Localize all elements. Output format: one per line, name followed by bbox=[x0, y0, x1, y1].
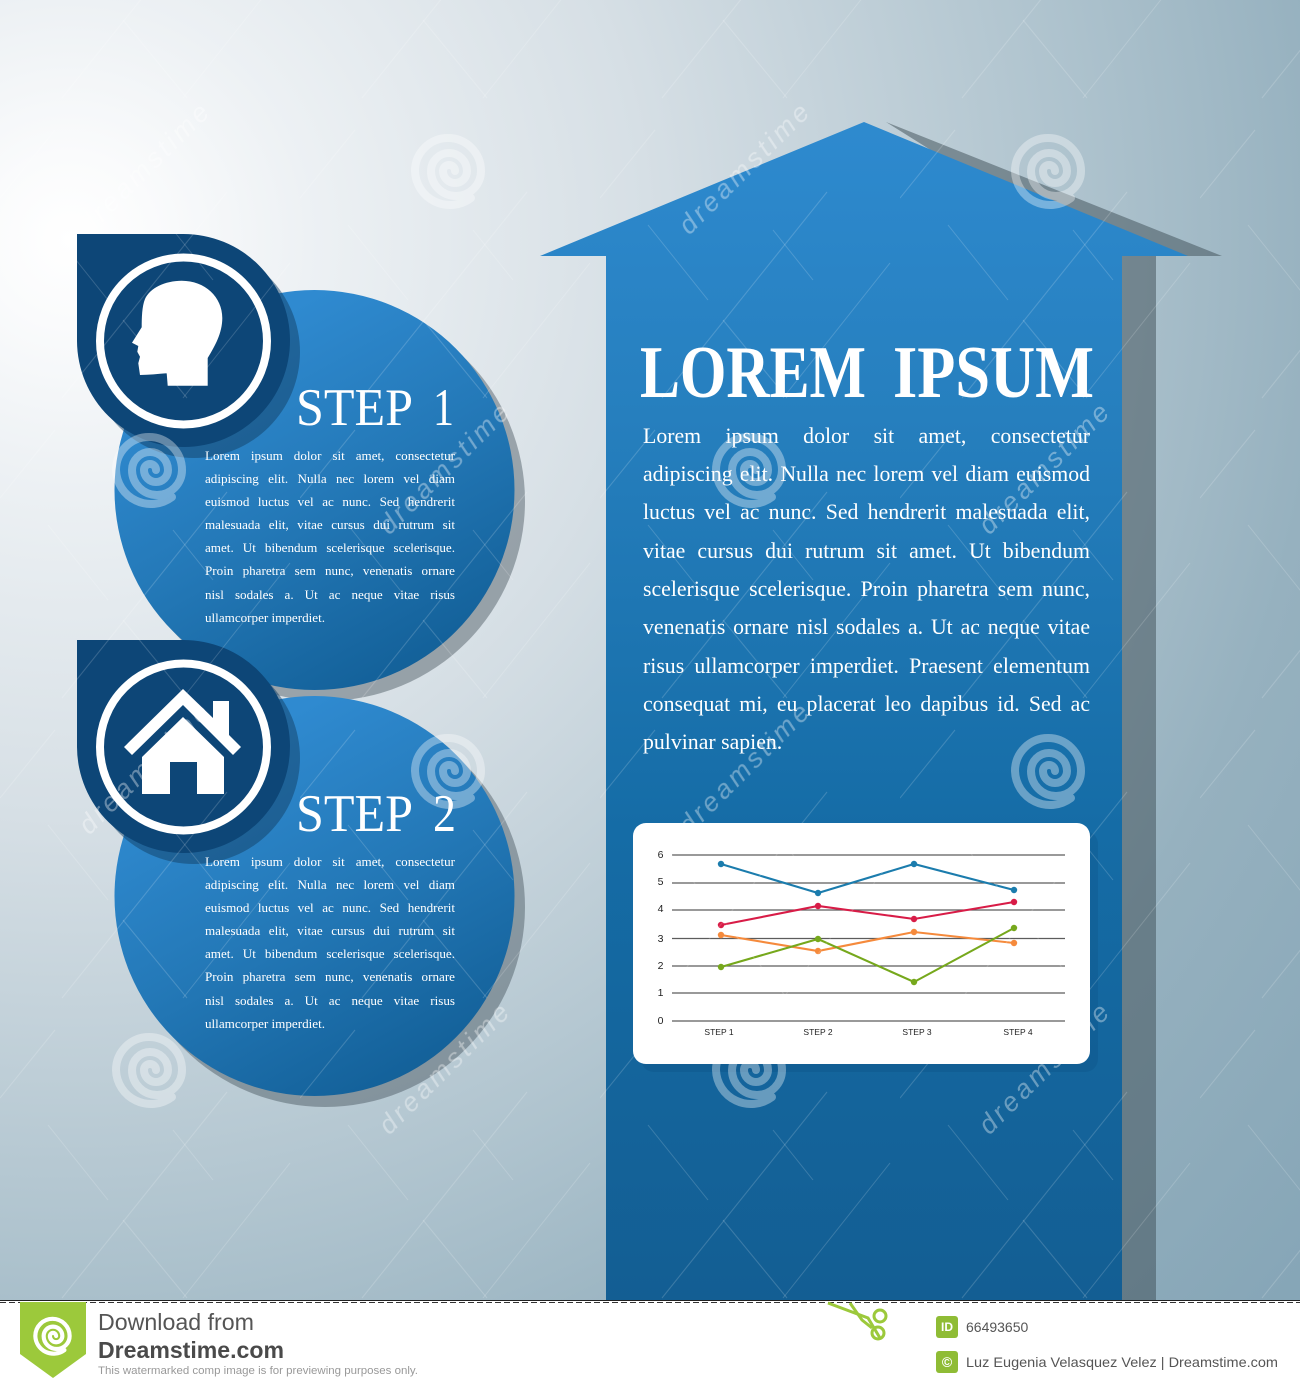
text block: step 1 body: malesuada elit, vitae cursus dui rutrum sit bbox=[205, 517, 455, 532]
title: IPSUM bbox=[893, 332, 1094, 414]
text block: step 2 body: Proin pharetra sem nunc, venenatis ornare bbox=[205, 969, 455, 984]
text block: step 1 body: adipiscing elit. Nulla nec lorem vel diam bbox=[205, 471, 455, 486]
text block: step 1 body: euismod luctus vel ac nunc. Sed hendrerit bbox=[205, 494, 455, 509]
line chart card: STEP 4 bbox=[1003, 1027, 1033, 1037]
icon: dreamstime ribbon bbox=[20, 1302, 86, 1378]
icon: step 2 house badge bbox=[77, 640, 300, 864]
title: LOREM bbox=[640, 332, 866, 414]
text block: step 2 body bbox=[205, 854, 455, 1031]
watermark: dreamstime text: dreamstime bbox=[972, 397, 1115, 540]
icon: step 1 person badge bbox=[77, 234, 300, 458]
footer band bbox=[0, 1300, 1300, 1390]
text block: step 2 body: malesuada elit, vitae cursus dui rutrum sit bbox=[205, 923, 455, 938]
arrow shadow bbox=[886, 122, 1222, 1300]
footer: download text: Download from bbox=[98, 1309, 254, 1335]
text block: step 1 body: nisl sodales a. Ut ac neque vitae risus bbox=[205, 587, 455, 602]
line chart card: STEP 3 bbox=[902, 1027, 932, 1037]
line chart card: 1 bbox=[658, 987, 664, 999]
footer: image id: 66493650 bbox=[966, 1319, 1029, 1335]
text block: step 1 body: ullamcorper imperdiet. bbox=[205, 610, 325, 625]
icon: id badge: ID bbox=[941, 1320, 953, 1334]
text block: main body: vitae cursus dui rutrum sit amet. Ut bibendum bbox=[643, 539, 1090, 563]
heading: step 2: STEP bbox=[296, 785, 413, 843]
text block: step 2 body: euismod luctus vel ac nunc. Sed hendrerit bbox=[205, 900, 455, 915]
line chart card: 2 bbox=[658, 960, 664, 972]
line chart card: 3 bbox=[658, 933, 664, 945]
text block: main body: pulvinar sapien. bbox=[643, 730, 782, 754]
footer: download text bbox=[98, 1309, 418, 1377]
heading: step 1: STEP bbox=[296, 379, 413, 437]
text block: main body bbox=[643, 424, 1090, 754]
text block: main body: Lorem ipsum dolor sit amet, consectetur bbox=[643, 424, 1090, 448]
panel: step 1 disc bbox=[114, 290, 525, 701]
watermark: dreamstime text: dreamstime bbox=[72, 697, 215, 840]
text block: step 1 body bbox=[205, 448, 455, 625]
icon: scissors bbox=[828, 1303, 886, 1339]
panel: step 2 disc bbox=[114, 696, 525, 1107]
text block: step 2 body: Lorem ipsum dolor sit amet, consectetur bbox=[205, 854, 455, 869]
watermark: dreamstime text: dreamstime bbox=[672, 97, 815, 240]
line chart card: STEP 2 bbox=[803, 1027, 833, 1037]
series: green bbox=[718, 925, 1017, 985]
text block: step 2 body: nisl sodales a. Ut ac neque vitae risus bbox=[205, 993, 455, 1008]
heading: step 1: 1 bbox=[433, 379, 454, 437]
line chart card: 4 bbox=[658, 903, 664, 915]
line chart card: 6 bbox=[658, 849, 664, 861]
line chart card: 0 bbox=[658, 1015, 664, 1027]
watermark: dreamstime text: dreamstime bbox=[372, 997, 515, 1140]
panel: main arrow bbox=[540, 122, 1188, 1300]
watermark: dreamstime text: dreamstime bbox=[372, 397, 515, 540]
icon: copyright badge: © bbox=[942, 1354, 953, 1370]
line chart card: STEP 1 bbox=[704, 1027, 734, 1037]
text block: step 2 body: ullamcorper imperdiet. bbox=[205, 1016, 325, 1031]
watermark: dreamstime text bbox=[72, 97, 1115, 1140]
watermark: dreamstime text: dreamstime bbox=[972, 997, 1115, 1140]
text block: main body: venenatis ornare nisl sodales a. Ut ac neque vitae bbox=[643, 615, 1090, 639]
text block: main body: adipiscing elit. Nulla nec lorem vel diam euismod bbox=[643, 462, 1090, 486]
series: red bbox=[718, 899, 1017, 928]
title bbox=[640, 332, 1094, 414]
icon: copyright badge bbox=[936, 1351, 958, 1373]
series: orange bbox=[718, 929, 1017, 954]
line chart card bbox=[633, 823, 1098, 1072]
heading: step 2: 2 bbox=[433, 785, 456, 843]
text block: step 2 body: amet. Ut bibendum scelerisque scelerisque. bbox=[205, 946, 455, 961]
watermark: dreamstime text: dreamstime bbox=[72, 97, 215, 240]
text block: main body: consequat mi, eu placerat leo dapibus id. Sed ac bbox=[643, 692, 1090, 716]
text block: main body: scelerisque scelerisque. Proin pharetra sem nunc, bbox=[643, 577, 1090, 601]
watermark: dreamstime text: dreamstime bbox=[672, 697, 815, 840]
text block: main body: risus ullamcorper imperdiet. Praesent elementum bbox=[643, 654, 1090, 678]
line chart card: 5 bbox=[658, 876, 664, 888]
text block: main body: luctus vel ac nunc. Sed hendrerit malesuada elit, bbox=[643, 500, 1090, 524]
footer: download text: Dreamstime.com bbox=[98, 1337, 284, 1363]
footer: download text: This watermarked comp image is for previewing purposes only. bbox=[98, 1365, 418, 1377]
text block: step 1 body: Lorem ipsum dolor sit amet, consectetur bbox=[205, 448, 455, 463]
text block: step 1 body: amet. Ut bibendum scelerisque scelerisque. bbox=[205, 540, 455, 555]
watermark: spirals bbox=[116, 138, 1081, 1104]
series: blue bbox=[718, 861, 1017, 896]
icon: id badge bbox=[936, 1316, 958, 1338]
text block: step 2 body: adipiscing elit. Nulla nec lorem vel diam bbox=[205, 877, 455, 892]
text block: step 1 body: Proin pharetra sem nunc, venenatis ornare bbox=[205, 563, 455, 578]
footer: author credit: Luz Eugenia Velasquez Velez | Dreamstime.com bbox=[966, 1354, 1278, 1370]
